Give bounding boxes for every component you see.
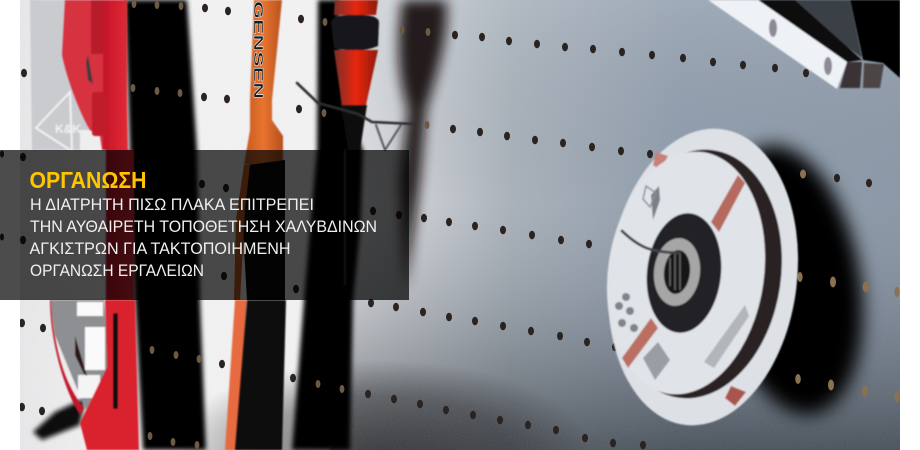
icon circles bbox=[615, 293, 638, 332]
red tool: upper handle bbox=[62, 0, 134, 300]
description text bbox=[30, 196, 377, 280]
wire hook bbox=[297, 83, 414, 150]
logo print on plate, left bbox=[30, 0, 90, 150]
print marks bbox=[651, 186, 660, 220]
wire hook through disc bbox=[622, 231, 680, 253]
orange tool handle with brand text bbox=[225, 0, 286, 450]
hub bbox=[646, 212, 722, 334]
shadow of tool: black vertical band bbox=[125, 0, 206, 450]
bore thread bbox=[670, 254, 680, 290]
dots visible under panel at left edge bbox=[0, 150, 4, 240]
barcode bbox=[704, 305, 749, 368]
shadow cast by cutting disc bbox=[749, 132, 876, 426]
back disc bbox=[609, 128, 800, 426]
metal ring bbox=[652, 237, 702, 307]
screwdriver bbox=[331, 0, 379, 285]
red stripe upper right bbox=[711, 175, 745, 232]
logo print on plate, left: K&K bbox=[55, 122, 81, 136]
disc dark rim bbox=[658, 148, 783, 400]
description text: ΤΗΝ ΑΥΘΑΙΡΕΤΗ ΤΟΠΟΘΕΤΗΣΗ ΧΑΛΥΒΔΙΝΩΝ bbox=[30, 218, 377, 236]
description text: Η ΔΙΑΤΡΗΤΗ ΠΙΣΩ ΠΛΑΚΑ ΕΠΙΤΡΕΠΕΙ bbox=[30, 196, 314, 214]
holes next to disc inside shadow bbox=[795, 170, 900, 402]
red tool: lower body bbox=[50, 300, 139, 450]
brand lettering on handle: GENSEN bbox=[251, 1, 266, 99]
heading: ΟΡΓΑΝΩΣΗ bbox=[30, 167, 146, 193]
cutting disc stack bbox=[606, 128, 800, 426]
description text: ΟΡΓΑΝΩΣΗ ΕΡΓΑΛΕΙΩΝ bbox=[30, 262, 204, 280]
holes seen inside shadows bbox=[131, 0, 430, 449]
blurred shadow of screwdriver bbox=[399, 0, 447, 290]
description text: ΑΓΚΙΣΤΡΩΝ ΓΙΑ ΤΑΚΤΟΠΟΙΗΜΕΝΗ bbox=[30, 240, 290, 258]
red stripe lower left bbox=[622, 318, 658, 368]
shadow of orange tool bbox=[292, 0, 363, 450]
front disc face bbox=[606, 150, 766, 396]
centre bore bbox=[662, 249, 692, 295]
QR code bbox=[643, 342, 670, 380]
top-right bracket bbox=[708, 0, 900, 89]
caption panel bbox=[0, 150, 409, 300]
soft shadow: red tool lower left bbox=[33, 398, 85, 440]
